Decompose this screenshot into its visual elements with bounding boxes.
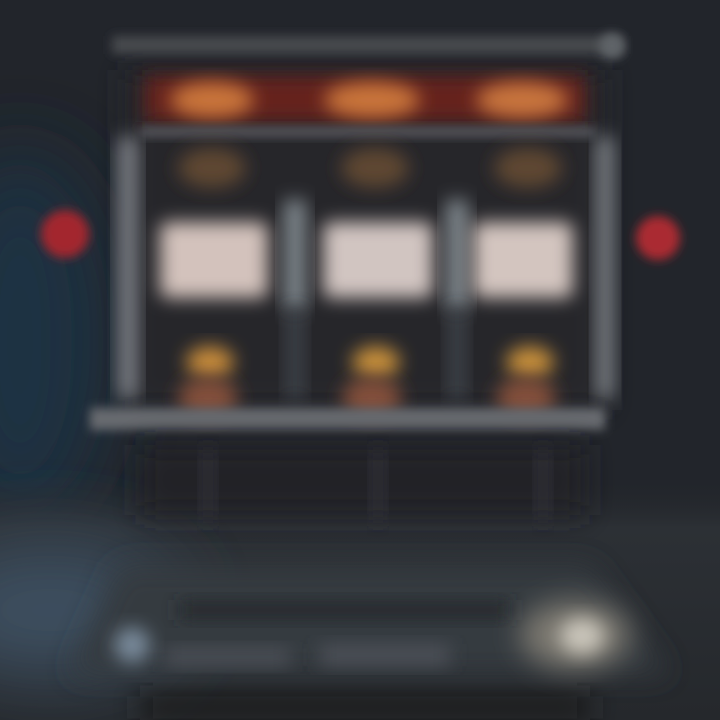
left highlight: [114, 627, 150, 663]
frame rail: [140, 127, 595, 137]
reel 1: [160, 148, 268, 418]
marquee lights: [145, 76, 585, 122]
right red button: [636, 216, 680, 260]
reel 2: [323, 148, 433, 418]
reel 3: [473, 148, 573, 418]
keyboard deck: [70, 565, 670, 720]
left red button: [41, 210, 89, 258]
floor: [0, 480, 720, 720]
machine body: [118, 70, 614, 410]
base bar: [90, 408, 605, 430]
top bar: [112, 33, 625, 59]
right highlight: [520, 601, 630, 669]
lower cabinet: [140, 445, 585, 520]
blue wall glow: [0, 150, 110, 530]
